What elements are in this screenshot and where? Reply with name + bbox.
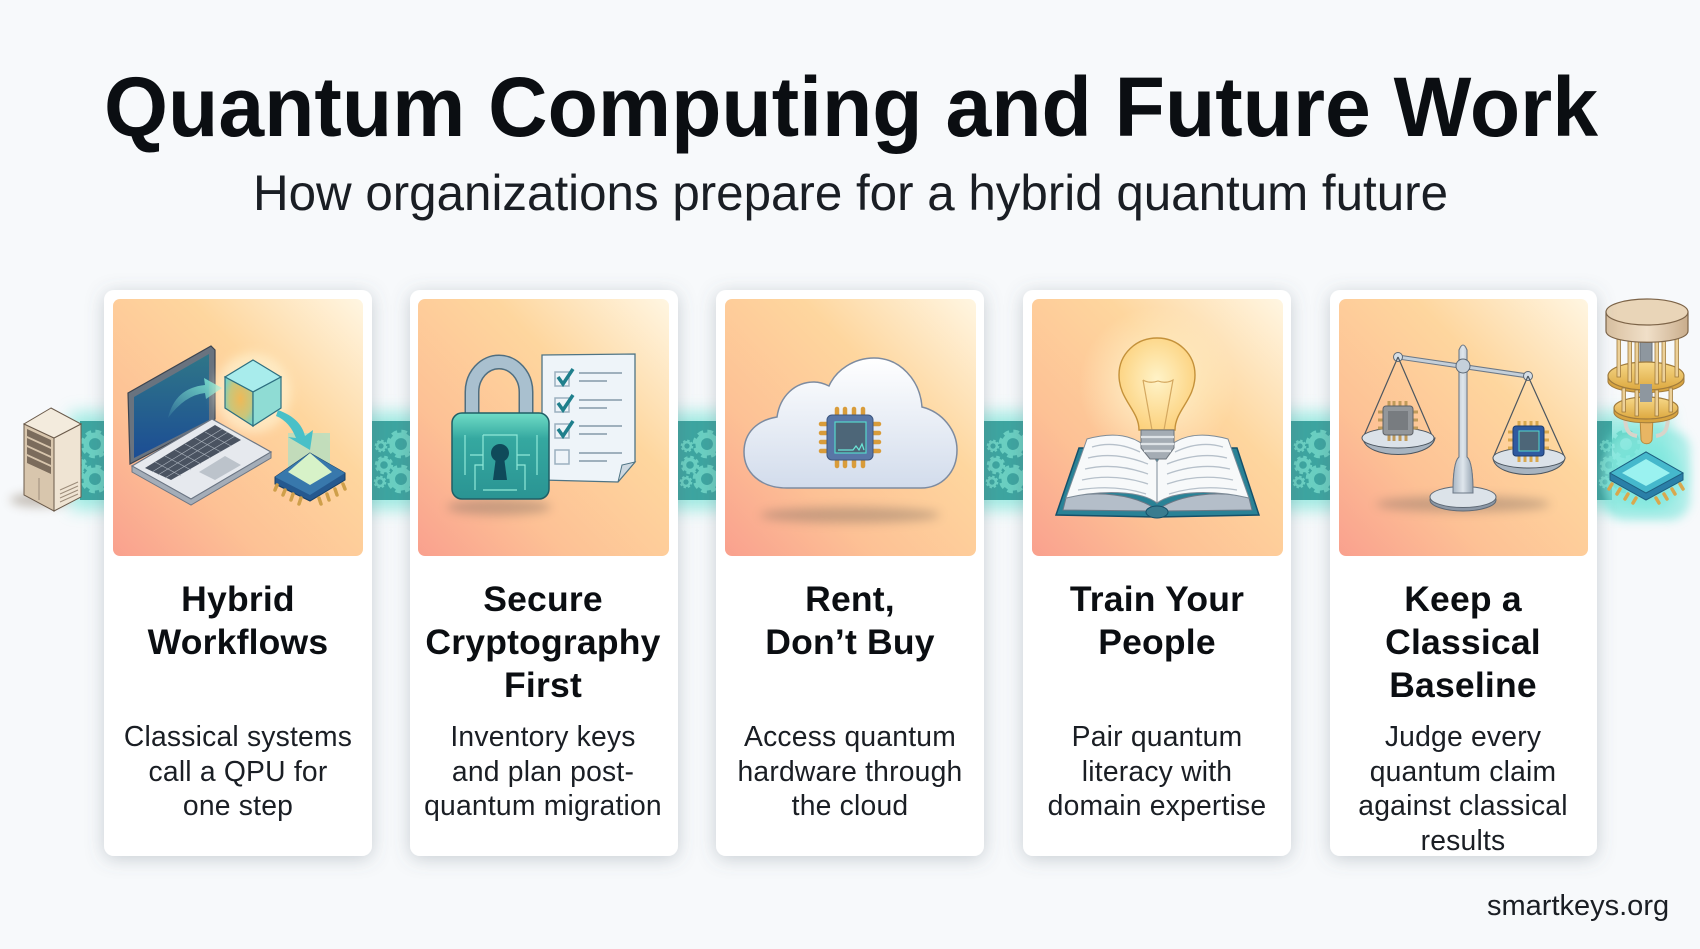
description: Pair quantum <box>1072 720 1242 752</box>
heading: Cryptography <box>425 622 661 662</box>
card: train your people <box>1023 290 1291 856</box>
description: hardware through <box>737 755 963 787</box>
heading: Hybrid <box>181 579 295 619</box>
heading: First <box>504 665 582 705</box>
heading: People <box>1098 622 1216 662</box>
description: and plan post- <box>452 755 634 787</box>
description: domain expertise <box>1048 789 1266 821</box>
heading: Secure <box>483 579 603 619</box>
icon: cloud with chip <box>744 358 957 523</box>
card: keep a classical baseline <box>1330 290 1597 856</box>
card: secure cryptography first <box>410 290 678 856</box>
heading: Workflows <box>148 622 328 662</box>
card: rent, don't buy <box>716 290 984 856</box>
source credit: smartkeys.org <box>1487 890 1669 922</box>
icon: quantum computer and chip <box>1596 299 1696 521</box>
description: call a QPU for <box>149 755 327 787</box>
icon: classical server <box>10 408 81 511</box>
card: hybrid workflows <box>104 290 372 856</box>
subtitle: How organizations prepare for a hybrid quantum future <box>253 165 1448 221</box>
description: quantum claim <box>1370 755 1556 787</box>
heading: Keep a <box>1404 579 1522 619</box>
description: against classical <box>1358 789 1568 821</box>
description: quantum migration <box>424 789 662 821</box>
icon: padlock and checklist <box>447 354 635 515</box>
heading: Rent, <box>805 579 895 619</box>
heading: Baseline <box>1389 665 1537 705</box>
heading: Don’t Buy <box>765 622 935 662</box>
title: Quantum Computing and Future Work <box>104 60 1598 154</box>
heading: Classical <box>1385 622 1541 662</box>
description: the cloud <box>792 789 908 821</box>
icon: laptop, cube and chip <box>128 346 345 505</box>
icon: balance scale with two chips <box>1362 345 1565 512</box>
description: one step <box>183 789 293 821</box>
heading: Train Your <box>1070 579 1244 619</box>
description: literacy with <box>1082 755 1232 787</box>
icon: light bulb over open book <box>1056 307 1259 518</box>
connector band with gears <box>68 412 1670 510</box>
description: results <box>1421 824 1505 856</box>
description: Inventory keys <box>450 720 636 752</box>
description: Access quantum <box>744 720 956 752</box>
description: Classical systems <box>124 720 352 752</box>
description: Judge every <box>1385 720 1542 752</box>
